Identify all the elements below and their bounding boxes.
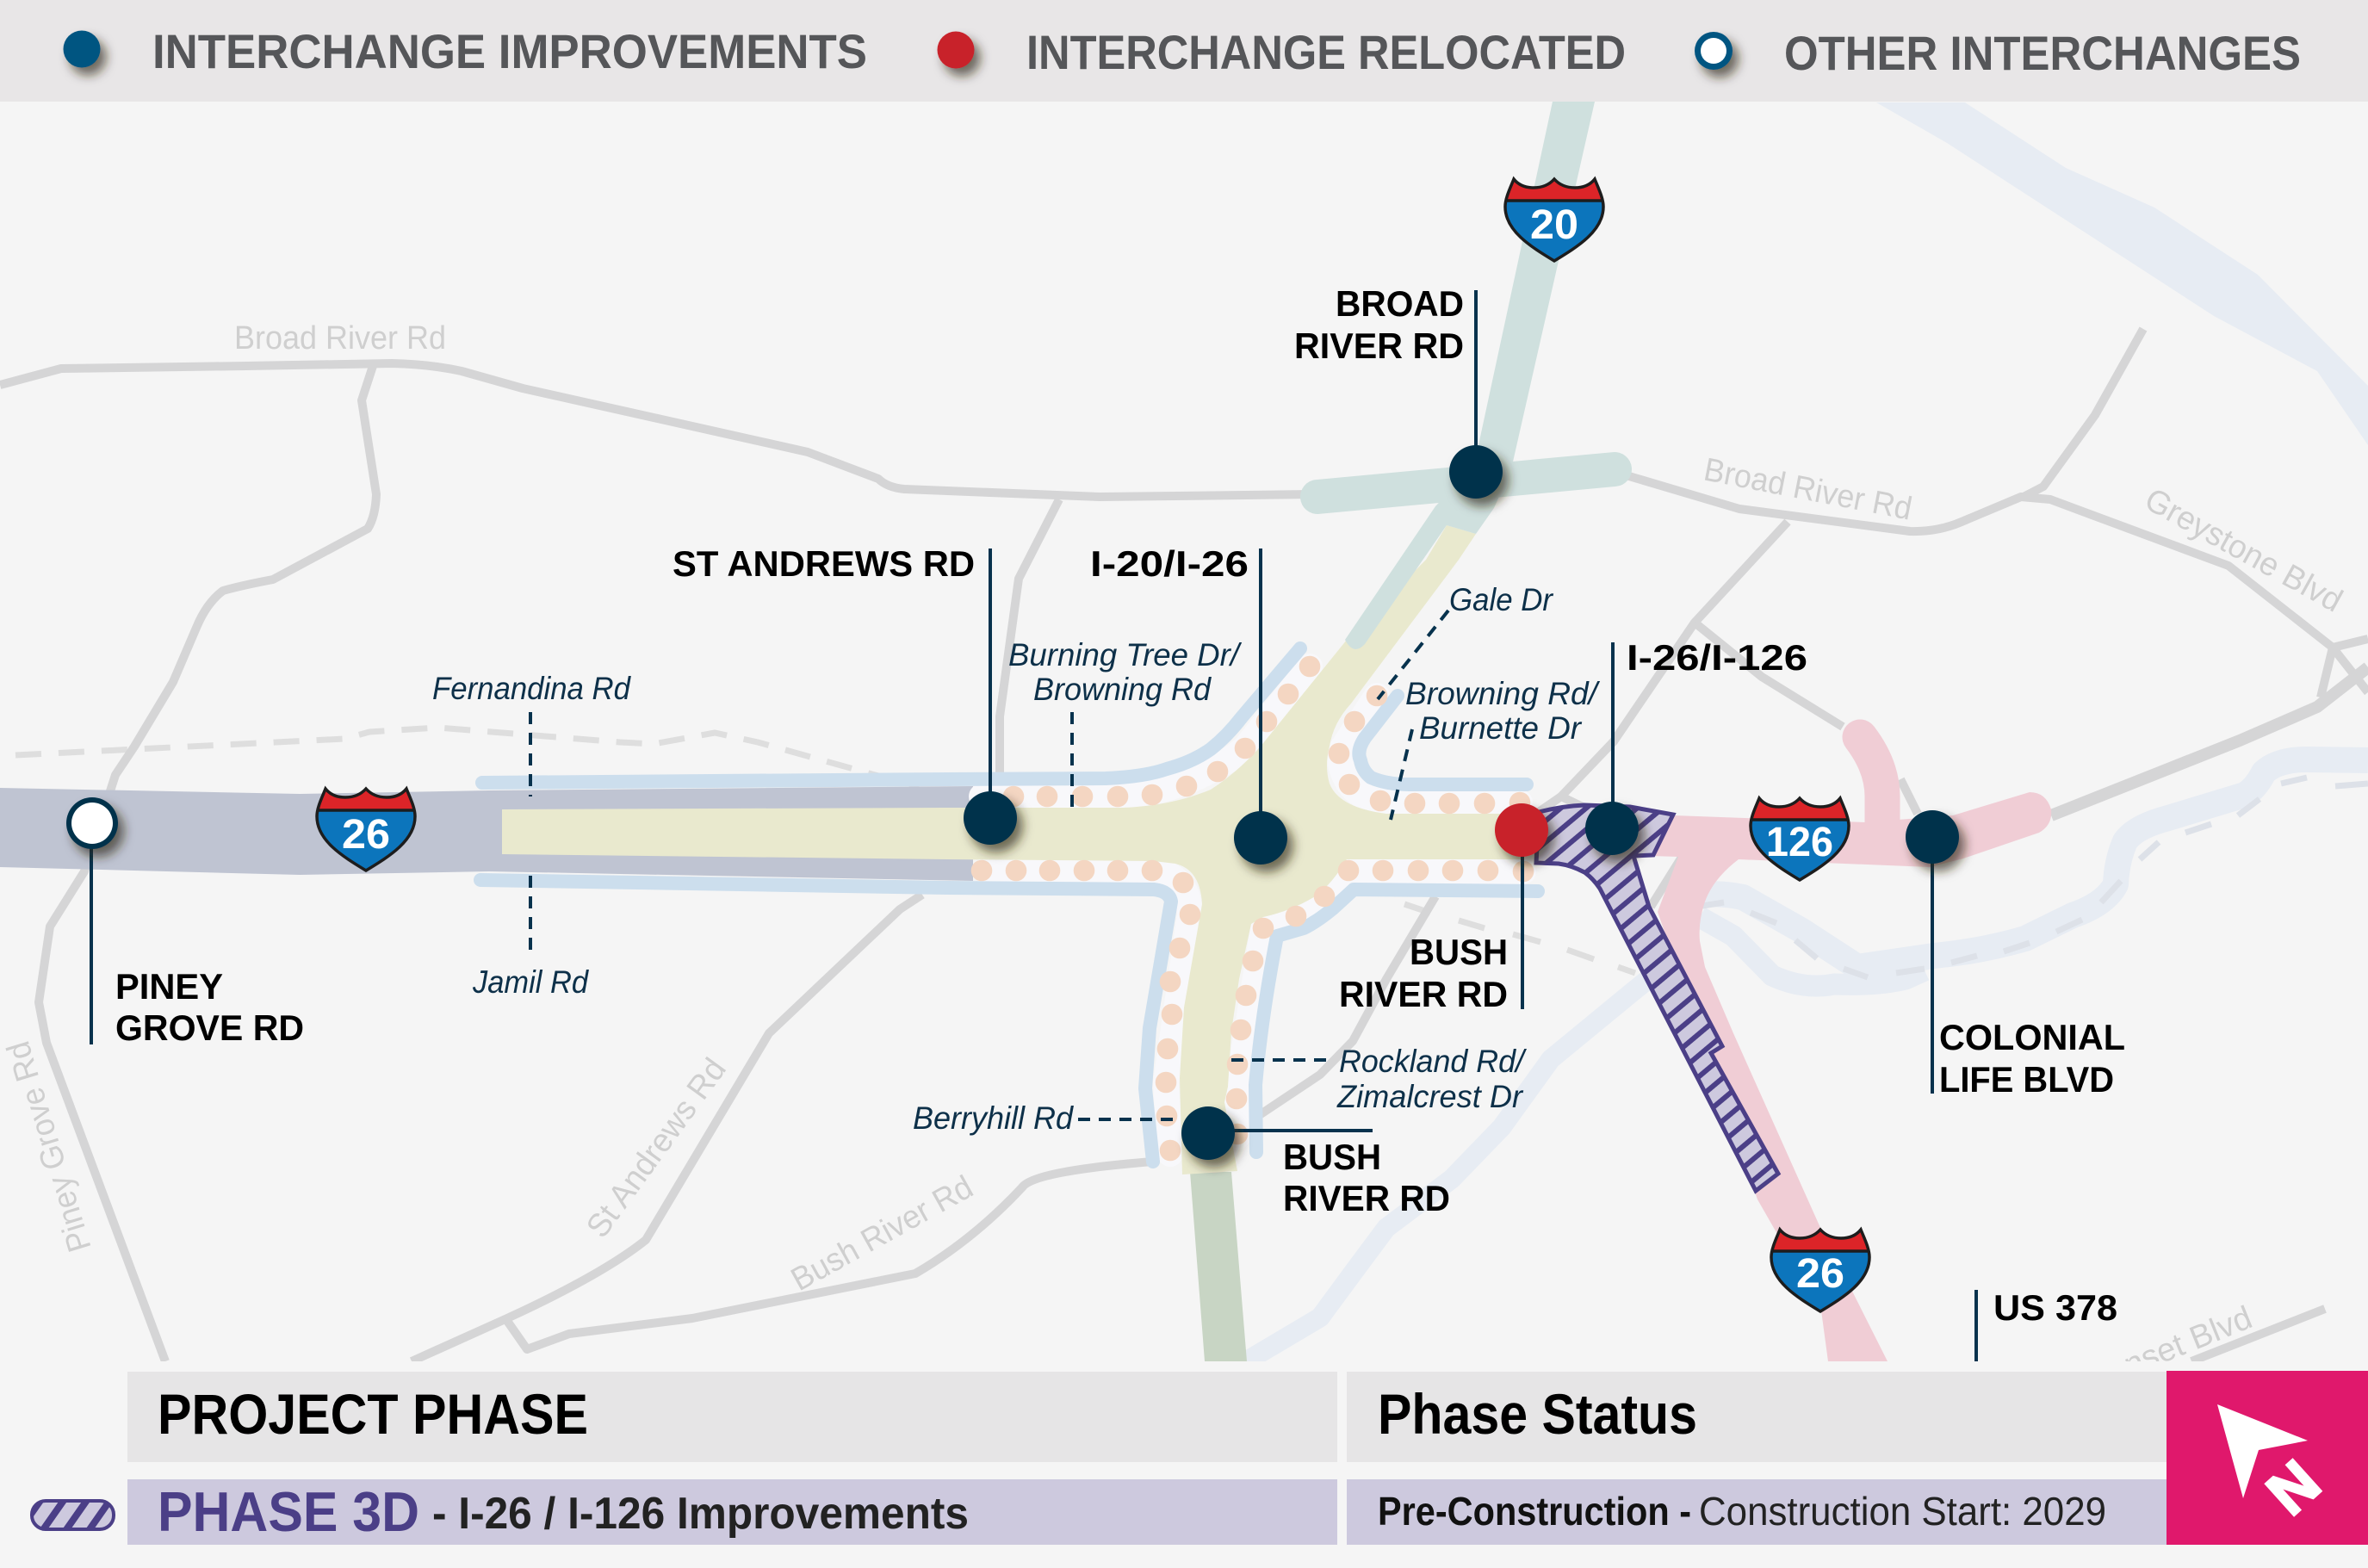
road label: Browning Rd / Burnette Dr: Browning Rd/ [1405, 676, 1601, 711]
legend band [0, 0, 2368, 102]
label: Broad River Rd: RIVER RD [1294, 325, 1464, 366]
bottom background strip [0, 1361, 2368, 1568]
road label: Gale Dr: Gale Dr [1449, 582, 1554, 617]
street label: Bush River Rd: Bush River Rd [785, 1169, 979, 1298]
gray local roads [0, 329, 2368, 1361]
label: I-20/I-26: I-20/I-26 [1090, 543, 1249, 584]
panel: project phase heading [127, 1372, 1337, 1462]
legend: interchange improvements: INTERCHANGE IMPROVEMENTS [152, 24, 867, 78]
street label: Greystone Blvd: Greystone Blvd [2139, 481, 2348, 619]
street label: Broad River Rd west: Broad River Rd [234, 320, 446, 356]
shield: I-26 south: 26 [1796, 1251, 1844, 1297]
road label: Rockland Rd / Zimalcrest Dr: Rockland Rd/ [1339, 1044, 1528, 1079]
road label: Browning Rd / Burnette Dr: Burnette Dr [1419, 710, 1583, 746]
panel: Phase 3D row: PHASE 3D [158, 1480, 419, 1543]
label: Colonial Life Blvd: LIFE BLVD [1939, 1059, 2114, 1100]
panel: status row: Construction Start: 2029 [1699, 1489, 2106, 1534]
shield: I-126 [1751, 798, 1849, 880]
road: I-26 west in slate [0, 786, 973, 881]
label: Broad River Rd [1294, 283, 1464, 366]
label: Colonial Life Blvd [1939, 1017, 2125, 1100]
dashed line along the river [1702, 778, 2368, 977]
frontage roads in light blue [480, 648, 1538, 1162]
road: I-20 north in green [1317, 102, 1615, 649]
panel: project phase heading: PROJECT PHASE [158, 1382, 588, 1446]
marker: I-26/I-126 [1585, 802, 1639, 855]
label: Broad River Rd: BROAD [1336, 283, 1464, 324]
legend: interchange relocated: INTERCHANGE RELOCATED [1026, 25, 1626, 79]
label: Bush River Rd relocated [1339, 932, 1508, 1014]
label: Bush River Rd south: BUSH [1283, 1137, 1381, 1177]
marker: Colonial Life Blvd [1906, 810, 1959, 864]
street label: Broad River Rd east: Broad River Rd [1701, 452, 1915, 528]
label: Bush River Rd relocated: RIVER RD [1339, 974, 1508, 1014]
street label: Sunset Blvd: Sunset Blvd [2082, 1299, 2257, 1398]
label: Piney Grove Rd [115, 966, 304, 1048]
road label: Berryhill Rd: Berryhill Rd [913, 1100, 1074, 1136]
panel: status row: Pre-Construction - [1378, 1489, 1691, 1534]
label: I-26/I-126: I-26/I-126 [1627, 637, 1807, 678]
shield: I-126: 126 [1766, 820, 1833, 865]
marker: Bush River Rd south [1181, 1106, 1235, 1160]
north arrow: N [2255, 1448, 2333, 1528]
panel: Phase 3D row [127, 1479, 1337, 1545]
shield: I-20: 20 [1530, 202, 1578, 248]
road label: Browning Rd / Burnette Dr [1405, 676, 1601, 746]
road label: Jamil Rd: Jamil Rd [472, 964, 589, 1000]
shield: I-26 west: 26 [342, 812, 390, 858]
road label: Rockland Rd / Zimalcrest Dr: Zimalcrest Dr [1336, 1079, 1524, 1114]
shield: I-20 [1505, 179, 1603, 261]
marker: Bush River Rd relocated [1495, 803, 1548, 857]
marker: Broad River Rd [1449, 445, 1503, 499]
panel: phase status heading: Phase Status [1378, 1382, 1697, 1446]
road label: Burning Tree Dr / Browning Rd: Browning Rd [1033, 672, 1212, 707]
marker: I-20/I-26 [1234, 811, 1287, 865]
label: Bush River Rd south [1283, 1137, 1450, 1218]
marker: Piney Grove Rd [66, 797, 118, 849]
dashed leader lines for local roads [530, 610, 1448, 1119]
road label: Fernandina Rd: Fernandina Rd [432, 671, 631, 706]
label: St Andrews Rd: ST ANDREWS RD [673, 543, 975, 584]
label: US 378: US 378 [1993, 1287, 2117, 1328]
panel: status row [1347, 1479, 2167, 1545]
label: Bush River Rd relocated: BUSH [1410, 932, 1508, 972]
road label: Rockland Rd / Zimalcrest Dr [1336, 1044, 1528, 1114]
label: Piney Grove Rd: GROVE RD [115, 1007, 304, 1048]
Phase 3D hatched project area [1536, 805, 1778, 1191]
river: lower course [1246, 759, 2368, 1361]
peach improvement dots [971, 656, 1534, 1161]
leader lines for interchange labels [91, 290, 1976, 1361]
river: upper right [1876, 102, 2368, 445]
improved corridor in pale yellow [502, 525, 1524, 1174]
panel: Phase 3D row: - I-26 / I-126 Improvements [432, 1489, 969, 1539]
white corridors behind improvement dots [982, 666, 1523, 1154]
road: southern segment in sage [1190, 1172, 1247, 1361]
street label: St Andrews Rd: St Andrews Rd [580, 1052, 734, 1244]
shield: I-26 south [1771, 1230, 1869, 1311]
road: I-126 and I-26 east in pink [1651, 737, 2051, 1361]
marker: St Andrews Rd [964, 791, 1017, 845]
label: Colonial Life Blvd: COLONIAL [1939, 1017, 2125, 1057]
north arrow [2167, 1371, 2368, 1545]
dashed boundary lines [15, 728, 1635, 973]
legend swatch: Phase 3D hatch [32, 1501, 114, 1529]
label: Piney Grove Rd: PINEY [115, 966, 223, 1007]
road label: Burning Tree Dr / Browning Rd [1008, 637, 1243, 707]
label: Bush River Rd south: RIVER RD [1283, 1178, 1450, 1218]
road label: Burning Tree Dr / Browning Rd: Burning Tree Dr/ [1008, 637, 1243, 672]
legend: other interchanges: OTHER INTERCHANGES [1784, 26, 2301, 80]
panel: phase status heading [1347, 1372, 2167, 1462]
shield: I-26 west [317, 789, 415, 871]
